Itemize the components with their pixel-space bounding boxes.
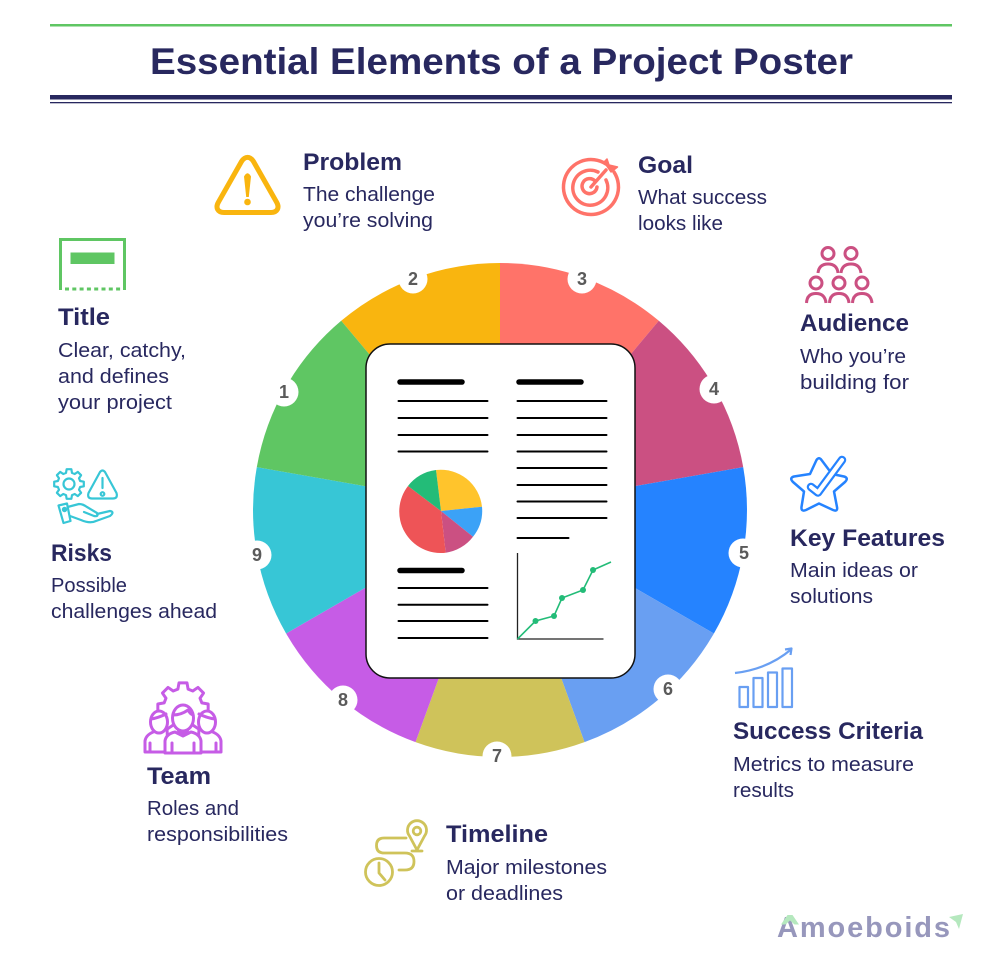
- panel: problem: Problem: [303, 149, 402, 176]
- panel: title element: your project: [58, 392, 172, 414]
- panel: goal: looks like: [638, 213, 723, 235]
- icon: team with gear: [145, 683, 221, 753]
- panel: audience: Audience: [800, 310, 909, 337]
- segmented wheel: 8: [338, 690, 348, 710]
- poster document: [366, 344, 635, 678]
- segmented wheel: 9: [252, 545, 262, 565]
- panel: problem: [217, 149, 435, 232]
- icon: rising bars: [735, 648, 792, 707]
- panel: success criteria: Metrics to measure: [733, 754, 914, 776]
- title header: Essential Elements of a Project Poster: [150, 41, 853, 82]
- panel: title element: [58, 240, 186, 414]
- panel: title element: Clear, catchy,: [58, 340, 186, 362]
- panel: risks: challenges ahead: [51, 601, 217, 623]
- panel: risks: Possible: [51, 575, 127, 597]
- icon: gear, warning and hand: [54, 469, 117, 523]
- panel: timeline: Major milestones: [446, 857, 607, 879]
- panel: audience: [800, 248, 909, 394]
- icon: title block: [60, 240, 124, 290]
- panel: team: Team: [147, 763, 211, 790]
- panel: goal: [563, 152, 767, 235]
- panel: key features: solutions: [790, 586, 873, 608]
- panel: timeline: [366, 821, 607, 905]
- panel: timeline: or deadlines: [446, 883, 563, 905]
- panel: success criteria: Success Criteria: [733, 718, 924, 745]
- panel: key features: [790, 458, 945, 608]
- panel: title element: and defines: [58, 366, 169, 388]
- panel: team: responsibilities: [147, 824, 288, 846]
- panel: timeline: Timeline: [446, 821, 548, 848]
- panel: success criteria: [733, 648, 924, 802]
- panel: goal: Goal: [638, 152, 693, 179]
- panel: audience: Who you’re: [800, 346, 906, 368]
- icon: group of people: [806, 248, 872, 303]
- panel: key features: Main ideas or: [790, 560, 918, 582]
- panel: key features: Key Features: [790, 525, 945, 552]
- line chart: [518, 553, 611, 639]
- panel: risks: [51, 469, 217, 623]
- segmented wheel: 7: [492, 746, 502, 766]
- panel: risks: Risks: [51, 540, 112, 567]
- panel: goal: What success: [638, 187, 767, 209]
- segmented wheel: 5: [739, 543, 749, 563]
- segmented wheel: 6: [663, 679, 673, 699]
- icon: target with arrow: [563, 159, 618, 215]
- segmented wheel: 3: [577, 269, 587, 289]
- pie chart: [399, 470, 482, 553]
- logo: Amoeboids: Amoeboids: [777, 912, 950, 944]
- panel: title element: Title: [58, 304, 110, 331]
- title header: [50, 24, 952, 103]
- panel: problem: The challenge: [303, 184, 435, 206]
- panel: team: Roles and: [147, 798, 239, 820]
- panel: audience: building for: [800, 372, 909, 394]
- panel: success criteria: results: [733, 780, 794, 802]
- segmented wheel: 2: [408, 269, 418, 289]
- segmented wheel: [242, 263, 758, 770]
- icon: warning triangle: [217, 157, 278, 212]
- panel: problem: you’re solving: [303, 210, 433, 232]
- segmented wheel: 1: [279, 382, 289, 402]
- segmented wheel: 4: [709, 379, 719, 399]
- icon: star with check: [791, 458, 847, 511]
- icon: route with clock and pin: [366, 821, 427, 886]
- panel: team: [145, 683, 288, 846]
